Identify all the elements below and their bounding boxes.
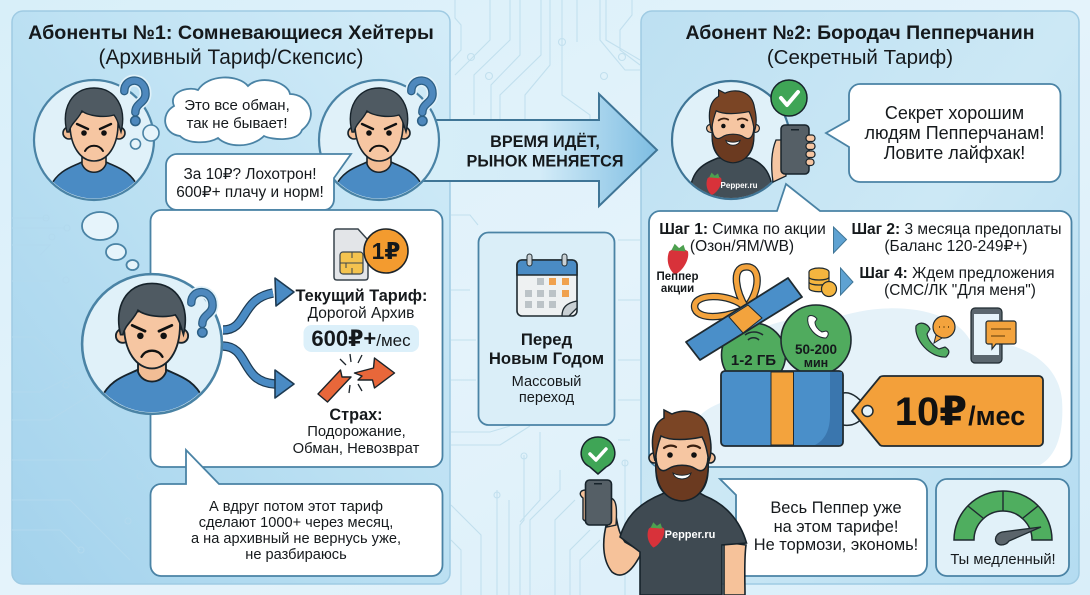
speech bubble: scam at 10 rubles	[166, 154, 351, 210]
step 4	[859, 265, 1055, 299]
title: subscriber 2: Абонент №2: Бородач Пепперчанин	[685, 22, 1035, 44]
step 2: Шаг 2: 3 месяца предоплаты	[851, 221, 1062, 238]
thought bubble: it's all a scam: так не бывает!	[187, 115, 287, 132]
lid with bow	[686, 267, 802, 360]
step 1: (Озон/ЯМ/WB)	[690, 238, 794, 255]
card: speedometer: Ты медленный!	[950, 552, 1056, 568]
label: current tariff: Дорогой Архив	[308, 305, 414, 322]
speech bubble: whole pepper uses this tariff: Не тормози, экономь!	[754, 536, 918, 554]
character: doubter 3 thinking	[82, 212, 222, 419]
arrow: to current tariff	[223, 278, 294, 330]
card: speedometer	[936, 479, 1069, 576]
t-shirt	[620, 491, 746, 595]
icon: sim card with 1 ruble coin	[334, 229, 408, 280]
character: bearded man with phone	[580, 410, 746, 595]
icon: gift with minutes and data	[686, 267, 851, 446]
title: subscribers 1: Абоненты №1: Сомневающиеся Хейтеры	[28, 22, 434, 44]
character: doubter 2	[319, 80, 439, 204]
speech bubble: secret for good people: Ловите лайфхак!	[884, 143, 1025, 163]
subtitle: archive tariff: (Архивный Тариф/Скепсис)	[99, 46, 363, 69]
panel: steps and price	[649, 184, 1072, 467]
arrow: step 3 to step 4	[840, 268, 853, 295]
price tag: 10 rubles per month: 10₽/мес	[895, 390, 1025, 434]
label: before new year: переход	[519, 390, 575, 406]
icon: smartphone with message	[971, 308, 1016, 363]
panel: subscriber 2	[641, 11, 1079, 584]
speech bubble: scam at 10 rubles: 600₽+ плачу и норм!	[176, 184, 324, 201]
thought bubble: it's all a scam: Это все обман,	[184, 97, 290, 114]
card: before new year	[478, 232, 614, 425]
step 1: Шаг 1: Симка по акции	[659, 221, 826, 238]
arrow: time passes	[421, 94, 657, 206]
icon: broken arrow	[318, 354, 394, 402]
right arm	[724, 542, 746, 595]
label: current tariff	[296, 287, 427, 322]
panel: subscribers 1	[12, 11, 450, 584]
minutes bubble: мин	[804, 356, 828, 370]
icon: phone in hand	[772, 125, 815, 182]
speech bubble: worry about price rise: не разбираюсь	[245, 547, 347, 563]
speech bubble: whole pepper uses this tariff: Весь Пеппер уже	[770, 499, 902, 517]
step 1	[659, 221, 826, 255]
label: before new year: Массовый	[512, 374, 581, 390]
panel: current tariff and fear	[150, 210, 442, 467]
icon: coins	[809, 268, 836, 296]
arrow: to fear	[223, 346, 294, 398]
label: before new year: Перед	[521, 330, 573, 349]
label: current tariff: Текущий Тариф:	[296, 287, 427, 305]
minutes bubble	[781, 305, 851, 375]
speech bubble: scam at 10 rubles: За 10₽? Лохотрон!	[183, 166, 317, 183]
speech bubble: whole pepper uses this tariff	[720, 479, 927, 576]
data bubble: 1-2 ГБ	[731, 352, 776, 369]
speech bubble: secret for good people: людям Пепперчанам!	[864, 123, 1045, 143]
arm and phone	[580, 480, 642, 575]
arrow: time passes: РЫНОК МЕНЯЕТСЯ	[467, 152, 623, 170]
pepper promo mark: акции	[661, 283, 694, 295]
speech bubble: worry about price rise: сделают 1000+ через месяц,	[199, 515, 393, 531]
label: fear: Страх:	[329, 406, 383, 424]
icon: phone call	[916, 316, 955, 357]
icon: check pin	[581, 437, 615, 474]
step 2	[851, 221, 1062, 255]
pepper promo mark: Пеппер	[657, 271, 698, 283]
character: bearded pepper user	[672, 80, 815, 200]
step 2: (Баланс 120-249₽+)	[884, 238, 1028, 255]
icon: sim card with 1 ruble coin: 1₽	[372, 238, 400, 264]
icon: calendar	[517, 254, 577, 316]
arrow: step 1 to step 2	[834, 227, 846, 253]
data bubble	[722, 323, 786, 387]
label: before new year	[489, 330, 604, 406]
step 4: Шаг 4: Ждем предложения	[859, 265, 1055, 282]
speech bubble: secret for good people	[826, 84, 1060, 182]
speech bubble: worry about price rise: а на архивный не вернусь уже,	[191, 531, 401, 547]
character: bearded pepper user: Pepper.ru	[721, 181, 758, 190]
thought bubble: it's all a scam	[165, 77, 311, 145]
speech bubble: worry about price rise	[150, 450, 442, 576]
label: fear	[293, 406, 420, 457]
step 4: (СМС/ЛК "Для меня")	[884, 282, 1036, 299]
label: before new year: Новым Годом	[489, 349, 604, 368]
speech bubble: secret for good people: Секрет хорошим	[885, 103, 1024, 123]
label: fear: Подорожание,	[307, 424, 406, 440]
price tag: 10 rubles per month	[843, 376, 1043, 446]
speech bubble: worry about price rise: А вдруг потом этот тариф	[209, 499, 383, 515]
character: doubter 1	[34, 80, 159, 204]
head	[649, 410, 715, 501]
box	[721, 371, 843, 446]
subtitle: secret tariff: (Секретный Тариф)	[767, 46, 953, 69]
minutes bubble: 50-200	[795, 342, 837, 357]
pepper promo mark	[657, 244, 698, 295]
gauge dial	[954, 491, 1052, 545]
price pill: 600 rubles per month: 600₽+/мес	[311, 326, 411, 351]
icon: green check badge	[771, 80, 807, 116]
arrow: time passes: ВРЕМЯ ИДЁТ,	[490, 133, 600, 151]
t-shirt: Pepper.ru	[665, 529, 715, 541]
speech bubble: whole pepper uses this tariff: на этом тарифе!	[774, 518, 898, 536]
label: fear: Обман, Невозврат	[293, 441, 420, 457]
